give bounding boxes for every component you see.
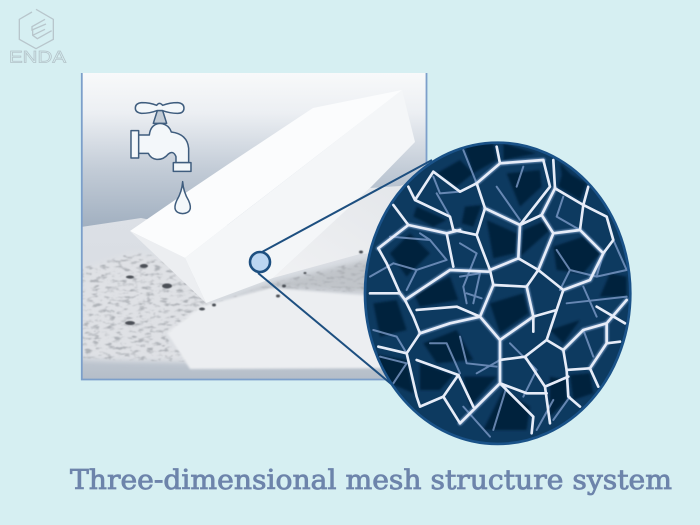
sponge body: [130, 90, 415, 303]
sponge top face: [130, 90, 402, 258]
sponge reflection: [168, 287, 382, 370]
logo wordmark: ENDA: [9, 48, 66, 66]
title: Three-dimensional mesh structure system: [70, 465, 672, 496]
panel: sponge photograph: [81, 73, 427, 380]
darker cell shading: [370, 143, 627, 430]
dark specks: [125, 250, 363, 325]
mesh strand glow: [378, 160, 627, 423]
lower connector: [258, 273, 396, 388]
icon: small magnifier circle on sponge: [250, 252, 270, 272]
faucet neck: [153, 111, 167, 123]
photo border: [82, 73, 427, 380]
floor: [82, 205, 386, 379]
secondary mesh strands: [370, 150, 627, 437]
primary mesh strands: [370, 147, 627, 433]
wedge shadow side of sponge: [274, 184, 404, 278]
grime on floor: [82, 253, 367, 364]
magnifier connector lines: [258, 160, 432, 388]
sponge end face: [130, 231, 206, 303]
sponge long face: [185, 113, 415, 303]
upper connector: [262, 160, 432, 252]
logo hexagon icon: [19, 9, 53, 49]
lens base: [365, 143, 630, 444]
faucet handle: [135, 103, 184, 113]
logo: ENDA: [9, 9, 66, 67]
back wall: [81, 73, 427, 233]
lens rim: [365, 143, 630, 444]
icon: water faucet: [131, 103, 191, 214]
faucet spout: [173, 163, 191, 171]
panel: magnified mesh structure: [365, 143, 630, 444]
faucet body: [138, 123, 189, 163]
water drop: [175, 182, 190, 214]
faucet flange: [131, 131, 139, 158]
